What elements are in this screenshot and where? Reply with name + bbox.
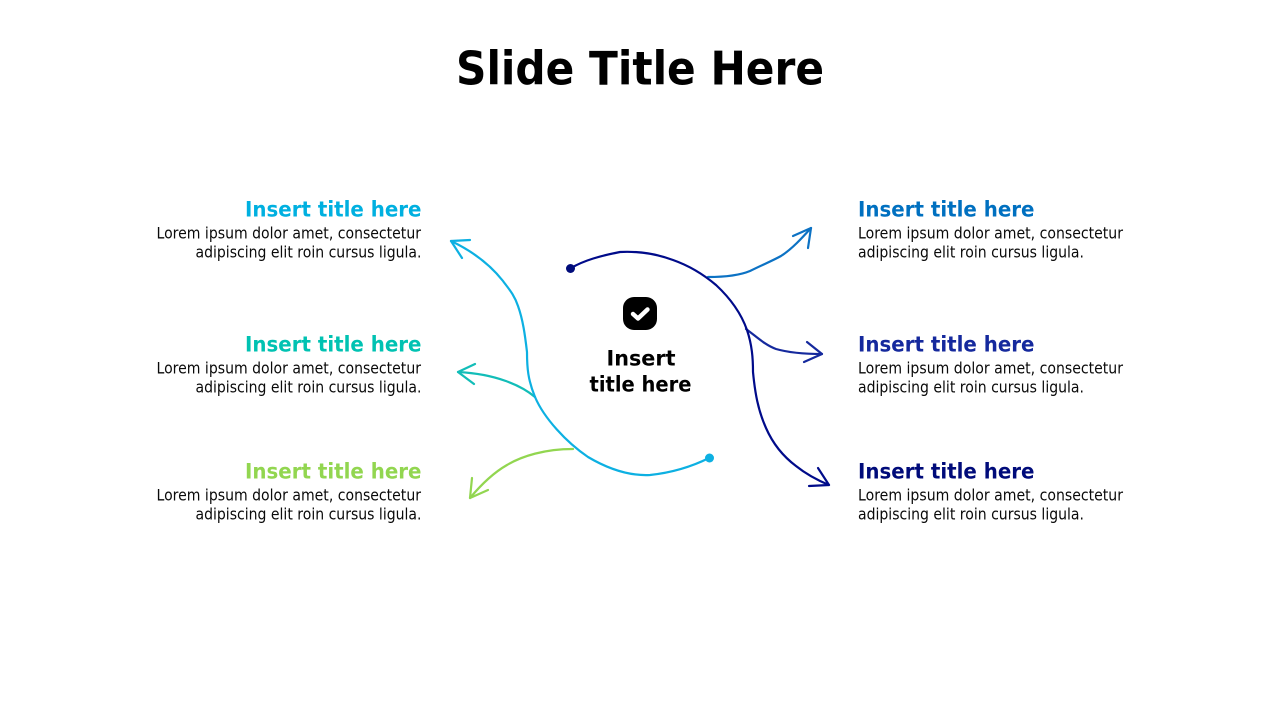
panel: right top text [858, 198, 1124, 262]
body: left top [156, 224, 422, 262]
heading: right top: Insert title here [858, 198, 1034, 222]
arrow: green branch [470, 449, 573, 498]
body: left middle: adipiscing elit roin cursus ligula. [196, 378, 422, 396]
body: right middle: adipiscing elit roin cursus ligula. [858, 378, 1084, 396]
heading: left middle: Insert title here [245, 332, 422, 356]
body: left bottom [156, 486, 422, 524]
body: right bottom [858, 486, 1124, 524]
icon: check badge [623, 297, 657, 330]
arrow: teal branch [458, 364, 535, 397]
body: right middle: Lorem ipsum dolor amet, consectetur [858, 360, 1124, 378]
panel: right bottom text [858, 460, 1124, 524]
body: left middle [156, 360, 422, 396]
arrow: cyan main curve [451, 240, 714, 475]
panel: left top text [156, 198, 422, 262]
body: left top: adipiscing elit roin cursus ligula. [196, 244, 422, 262]
dot: cyan curve start [705, 454, 714, 462]
body: right bottom: Lorem ipsum dolor amet, consectetur [858, 486, 1124, 504]
panel: left bottom text [156, 460, 422, 524]
body: right top [858, 224, 1124, 262]
center label: title here [590, 372, 692, 396]
heading: left top: Insert title here [245, 198, 422, 222]
panel: right middle text [858, 332, 1124, 396]
panel: left middle text [156, 332, 422, 396]
body: left bottom: Lorem ipsum dolor amet, consectetur [156, 486, 422, 504]
body: left middle: Lorem ipsum dolor amet, consectetur [156, 360, 422, 378]
heading: right bottom: Insert title here [858, 460, 1034, 484]
body: left bottom: adipiscing elit roin cursus ligula. [196, 506, 422, 524]
arrow: blue branch [708, 228, 811, 277]
body: right bottom: adipiscing elit roin cursus ligula. [858, 506, 1084, 524]
heading: left bottom: Insert title here [245, 460, 422, 484]
dot: navy curve start [566, 264, 575, 273]
title: Slide Title Here [456, 42, 824, 96]
body: right top: Lorem ipsum dolor amet, consectetur [858, 224, 1124, 242]
body: left top: Lorem ipsum dolor amet, consectetur [156, 224, 422, 242]
arrow: royal blue branch [746, 329, 822, 362]
center label [590, 346, 692, 396]
body: right top: adipiscing elit roin cursus ligula. [858, 244, 1084, 262]
arrow: navy main curve [566, 252, 829, 486]
heading: right middle: Insert title here [858, 332, 1034, 356]
body: right middle [858, 360, 1124, 396]
center label: Insert [606, 346, 676, 370]
